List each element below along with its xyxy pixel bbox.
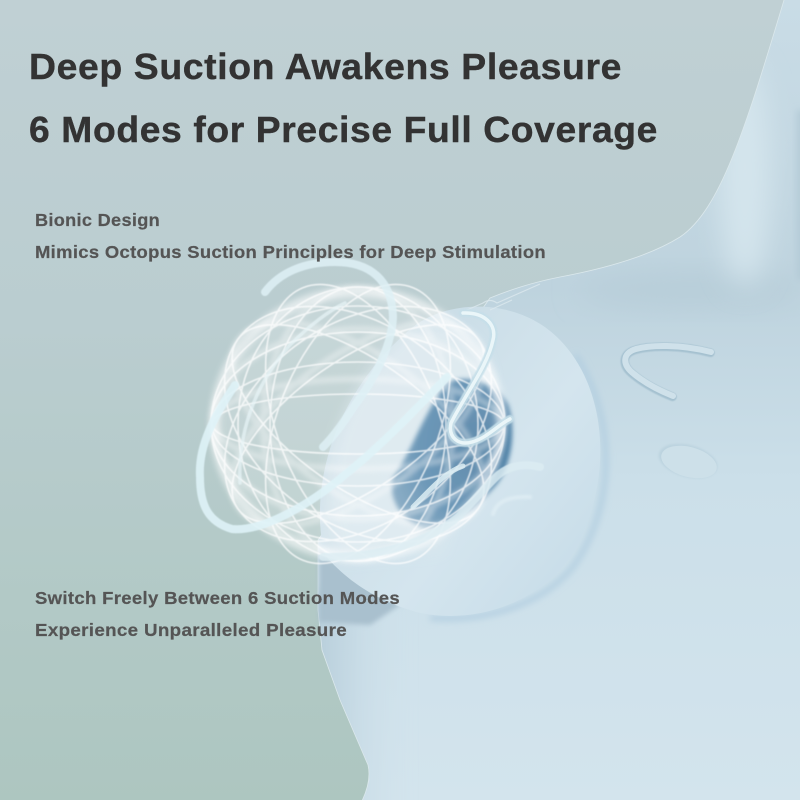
disc shape (320, 307, 600, 616)
ribbon: inner left band (240, 303, 345, 483)
body shading (318, 89, 800, 778)
disc shadow wedge (319, 550, 400, 625)
ribbon: small spike (413, 466, 463, 507)
suction cup disc (319, 284, 600, 625)
icon: oval button (655, 438, 721, 484)
wire mesh lines (180, 258, 536, 590)
ribbon: lower wave (323, 465, 540, 557)
title (29, 46, 658, 150)
ribbon: top swoop (265, 262, 393, 447)
ribbon: outer loop (200, 377, 447, 529)
title: Deep Suction Awakens Pleasure (29, 46, 622, 87)
top seam (460, 284, 540, 313)
cavity haze (328, 325, 490, 560)
dark cavity (392, 379, 512, 527)
text block: suction modes: Experience Unparalleled Pleasure (35, 620, 347, 640)
text block: bionic design (35, 210, 546, 262)
ribbon: right S curve (450, 313, 510, 443)
wire sphere graphic (180, 258, 540, 590)
sphere glow (211, 288, 503, 560)
text block: suction modes (35, 588, 400, 640)
wire mesh glow (198, 283, 518, 565)
title: 6 Modes for Precise Full Coverage (29, 109, 658, 150)
text block: suction modes: Switch Freely Between 6 Suction Modes (35, 588, 400, 608)
text block: bionic design: Bionic Design (35, 210, 160, 230)
ribbon: swirl on disc (493, 497, 530, 514)
rim glow (215, 292, 501, 556)
icon: curved V mark (625, 346, 711, 397)
ribbon strokes (200, 262, 540, 557)
text block: bionic design: Mimics Octopus Suction Principles for Deep Stimulation (35, 242, 546, 262)
